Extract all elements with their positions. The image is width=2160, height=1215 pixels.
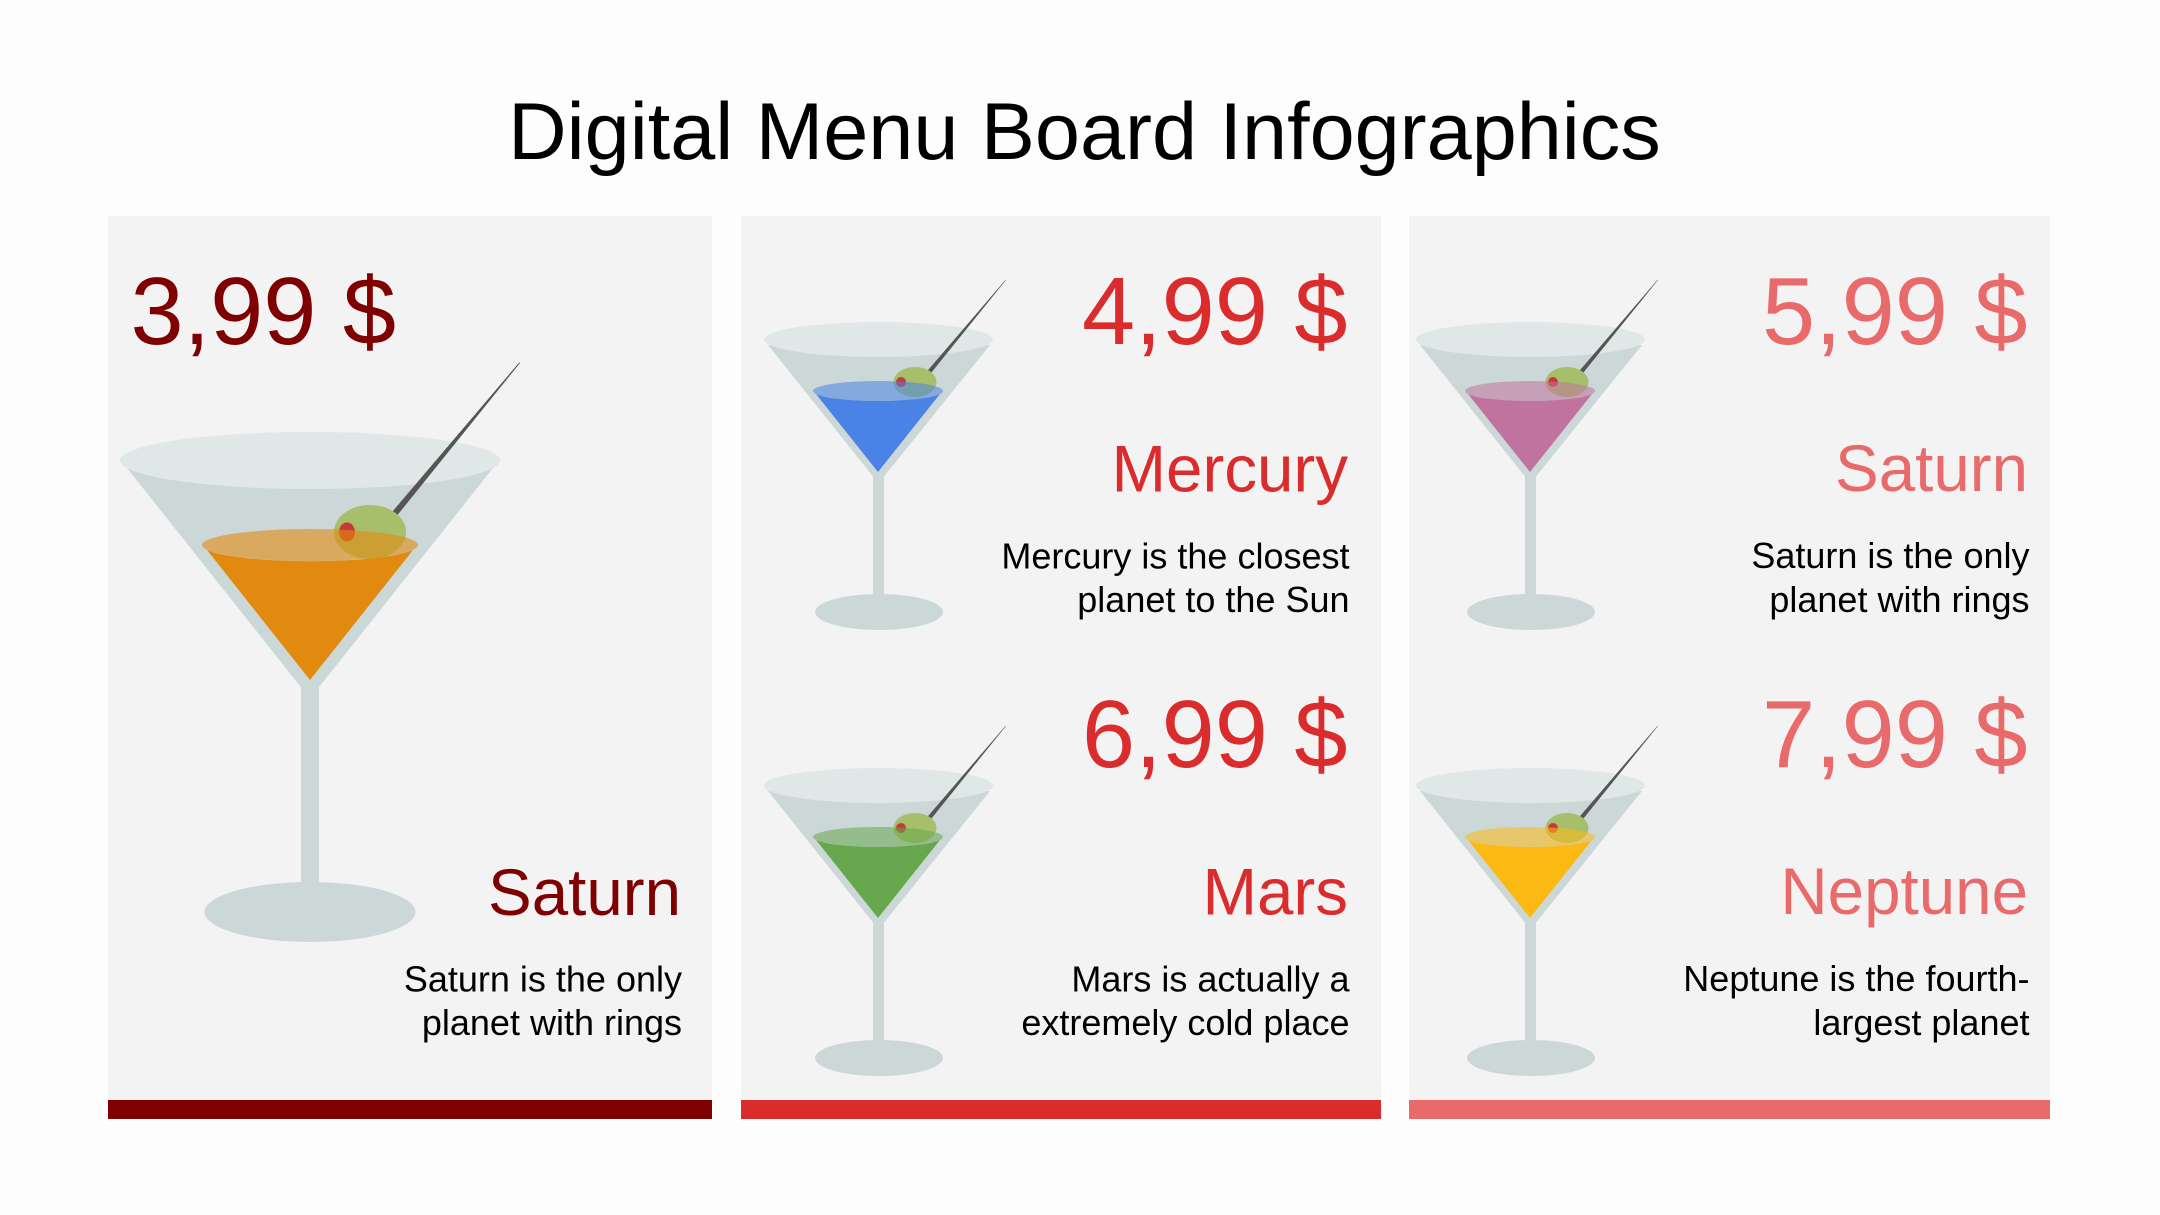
description: Mars is actually a [1071,958,1350,1000]
name: Saturn: Saturn [488,856,681,929]
description: Saturn is the only [404,958,682,1000]
icon: yellow cocktail [1416,726,1658,1076]
description: extremely cold place [1021,1002,1350,1043]
name: Mars: Mars [1202,856,1348,928]
name: Saturn: Saturn [1835,432,2028,505]
price: 4,99: 4,99 $ [1082,259,1348,365]
price: 7,99: 7,99 $ [1762,682,2028,788]
description: Mercury is the closest [1001,536,1350,576]
description: Neptune is the fourth- [1683,958,2030,999]
panel: Saturn 3,99 [108,216,712,1119]
description: largest planet [1813,1002,2030,1043]
description: Saturn is the only [1751,535,2030,576]
description: planet to the Sun [1077,579,1350,620]
description: planet with rings [422,1002,682,1043]
icon: green cocktail [764,726,1006,1076]
name: Mercury: Mercury [1111,432,1348,506]
name: Neptune: Neptune [1780,855,2028,928]
panel: Mercury and Mars [741,216,1381,1119]
price: 6,99: 6,99 $ [1082,682,1348,788]
price: 3,99: 3,99 $ [130,259,396,365]
panel: Saturn and Neptune [1409,216,2050,1119]
description: planet with rings [1769,579,2030,620]
title: Digital Menu Board Infographics [508,87,1661,177]
icon: blue cocktail [764,280,1006,630]
price: 5,99: 5,99 $ [1762,259,2028,365]
icon: pink cocktail [1416,280,1658,630]
icon: orange cocktail [120,362,520,942]
